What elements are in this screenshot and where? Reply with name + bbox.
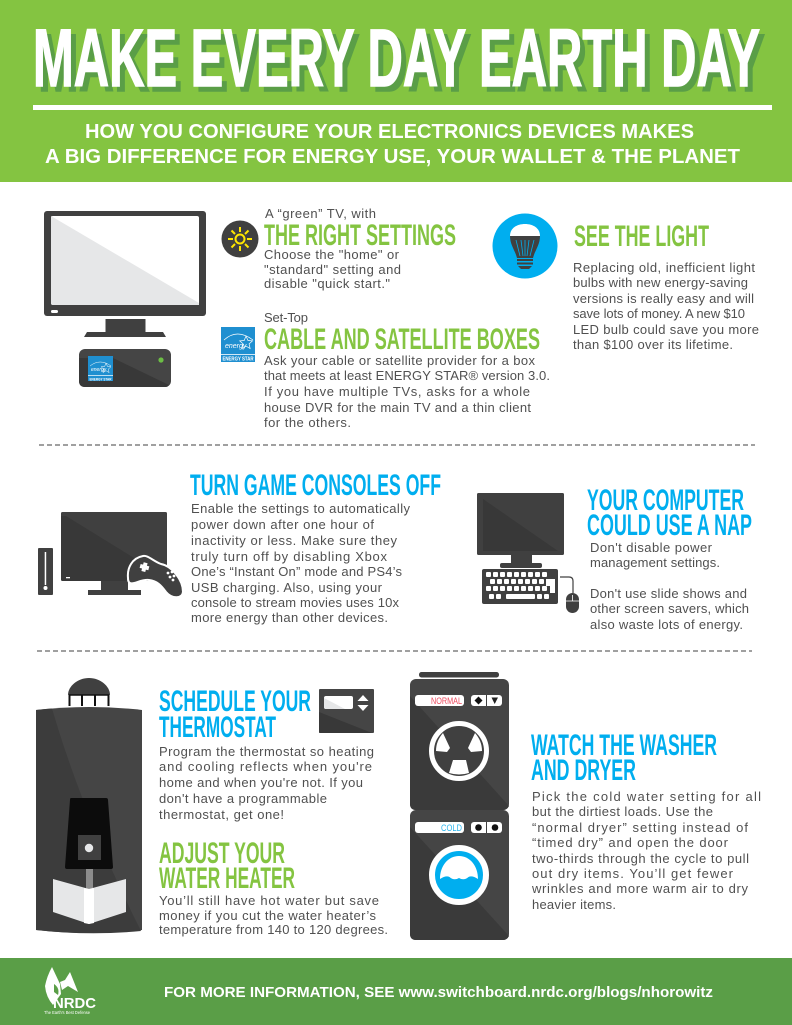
body text: but the dirtiest loads. Use the xyxy=(532,804,713,819)
body text: save lots of money. A new $10 xyxy=(573,306,745,321)
text block: schedule thermostat xyxy=(159,685,374,822)
body text: Pick the cold water setting for all xyxy=(532,789,761,804)
body text: You’ll still have hot water but save xyxy=(159,893,379,908)
icon: energy star logo: energy xyxy=(225,343,247,350)
body text: more energy than other devices. xyxy=(191,610,388,625)
body text: truly turn off by disabling Xbox xyxy=(191,549,388,564)
footer link text: FOR MORE INFORMATION, SEE www.switchboard.nrdc.org/blogs/nhorowitz xyxy=(164,984,713,1001)
icon: game console and TV xyxy=(38,512,183,597)
text block: game consoles xyxy=(190,469,441,625)
body text: heavier items. xyxy=(532,897,616,912)
heading: schedule your thermostat: SCHEDULE YOUR xyxy=(159,685,311,718)
body text xyxy=(531,789,761,912)
body text: don't have a programmable xyxy=(159,791,327,806)
icon: game controller xyxy=(128,556,183,597)
body text: wrinkles and more warm air to dry xyxy=(531,881,748,896)
icon: dryer: COLD xyxy=(441,823,462,833)
heading: adjust your water heater xyxy=(159,837,295,895)
icon: sun xyxy=(222,220,258,258)
icon: TV and set-top box: ENERGY STAR xyxy=(90,376,112,381)
logo: NRDC: NRDC xyxy=(53,995,96,1012)
heading: adjust your water heater: ADJUST YOUR xyxy=(159,837,285,870)
icon: desktop computer xyxy=(477,493,579,613)
body text: temperature from 140 to 120 degrees. xyxy=(159,922,388,937)
text block: washer and dryer xyxy=(531,729,761,912)
heading: cable and satellite boxes: CABLE AND SATELLITE BOXES xyxy=(264,323,540,356)
logo: NRDC xyxy=(44,967,96,1015)
body text: Choose the "home" or xyxy=(264,247,400,262)
icon: TV and set-top box: energy xyxy=(91,367,107,373)
icon: dryer xyxy=(410,810,509,940)
text block: computer nap xyxy=(587,484,752,632)
body text: other screen savers, which xyxy=(590,601,749,616)
text block: cable and satellite boxes xyxy=(264,310,550,430)
body text: Replacing old, inefficient light xyxy=(573,260,755,275)
body text: management settings. xyxy=(590,555,720,570)
heading: schedule your thermostat xyxy=(159,685,311,744)
body text: disable "quick start." xyxy=(264,276,390,291)
body text: “timed dry” and open the door xyxy=(532,835,729,850)
body text: One’s “Instant On” mode and PS4’s xyxy=(191,564,402,579)
body text: console to stream movies uses 10x xyxy=(191,595,400,610)
body text: inactivity or less. Make sure they xyxy=(191,533,398,548)
body text: If you have multiple TVs, asks for a whole xyxy=(264,384,530,399)
icon: energy star logo xyxy=(221,327,255,362)
body text: “normal dryer” setting instead of xyxy=(532,820,748,835)
body text: house DVR for the main TV and a thin client xyxy=(264,400,531,415)
text block: water heater xyxy=(159,837,388,937)
heading: watch the washer and dryer: AND DRYER xyxy=(531,754,636,787)
heading: your computer could use a nap xyxy=(587,484,752,542)
icon: TV and set-top box xyxy=(44,211,206,387)
subtitle xyxy=(45,120,740,168)
icon: water heater xyxy=(36,678,142,933)
icon: thermostat xyxy=(319,689,374,733)
body text: Ask your cable or satellite provider for a box xyxy=(264,353,536,368)
body text xyxy=(264,353,550,430)
icon: mouse xyxy=(560,577,579,613)
body text: also waste lots of energy. xyxy=(590,617,743,632)
body text: two-thirds through the cycle to pull xyxy=(532,851,749,866)
text block: cable and satellite boxes: Set-Top xyxy=(264,310,308,325)
icon: light bulb xyxy=(492,214,558,278)
body text: Enable the settings to automatically xyxy=(191,501,410,516)
body text: Program the thermostat so heating xyxy=(159,744,374,759)
body text: "standard" setting and xyxy=(264,262,401,277)
body text: and cooling reflects when you're xyxy=(159,759,372,774)
body text: USB charging. Also, using your xyxy=(191,580,383,595)
heading: watch the washer and dryer xyxy=(531,729,717,787)
subtitle: A BIG DIFFERENCE FOR ENERGY USE, YOUR WALLET & THE PLANET xyxy=(45,145,740,168)
text block: right settings: A “green” TV, with xyxy=(265,206,376,221)
header banner xyxy=(0,0,792,182)
body text: LED bulb could save you more xyxy=(573,322,759,337)
body text: money if you cut the water heater’s xyxy=(159,908,376,923)
heading: schedule your thermostat: THERMOSTAT xyxy=(159,711,276,744)
body text: out dry items. You’ll get fewer xyxy=(532,866,734,881)
body text: home and when you're not. If you xyxy=(159,775,363,790)
body text: Don't disable power xyxy=(590,540,713,555)
text block: right settings xyxy=(264,206,456,291)
heading: the right settings: THE RIGHT SETTINGS xyxy=(264,219,456,252)
body text xyxy=(264,247,401,291)
heading: adjust your water heater: WATER HEATER xyxy=(159,862,295,895)
body text: that meets at least ENERGY STAR® version 3.0. xyxy=(264,368,550,383)
logo: NRDC: The Earth's Best Defense xyxy=(44,1010,90,1015)
text block: see the light xyxy=(573,220,759,352)
footer banner xyxy=(0,958,792,1025)
icon: energy star logo: ENERGY STAR xyxy=(222,356,254,362)
body text xyxy=(191,501,410,625)
body text: Don't use slide shows and xyxy=(590,586,747,601)
icon: washer xyxy=(410,672,509,810)
body text: power down after one hour of xyxy=(191,517,374,532)
body text: bulbs with new energy-saving xyxy=(573,275,748,290)
heading: turn game consoles off: TURN GAME CONSOLES OFF xyxy=(190,469,441,502)
body text xyxy=(159,744,374,822)
body text: thermostat, get one! xyxy=(159,807,284,822)
body text: versions is really easy and will xyxy=(573,291,754,306)
icon: keyboard xyxy=(482,569,558,604)
body text xyxy=(159,893,388,937)
body text xyxy=(573,260,759,352)
body text: for the others. xyxy=(264,415,351,430)
icon: washer: NORMAL xyxy=(431,696,462,706)
body text xyxy=(590,540,749,632)
subtitle: HOW YOU CONFIGURE YOUR ELECTRONICS DEVICES MAKES xyxy=(85,120,694,143)
body text: than $100 over its lifetime. xyxy=(573,337,733,352)
